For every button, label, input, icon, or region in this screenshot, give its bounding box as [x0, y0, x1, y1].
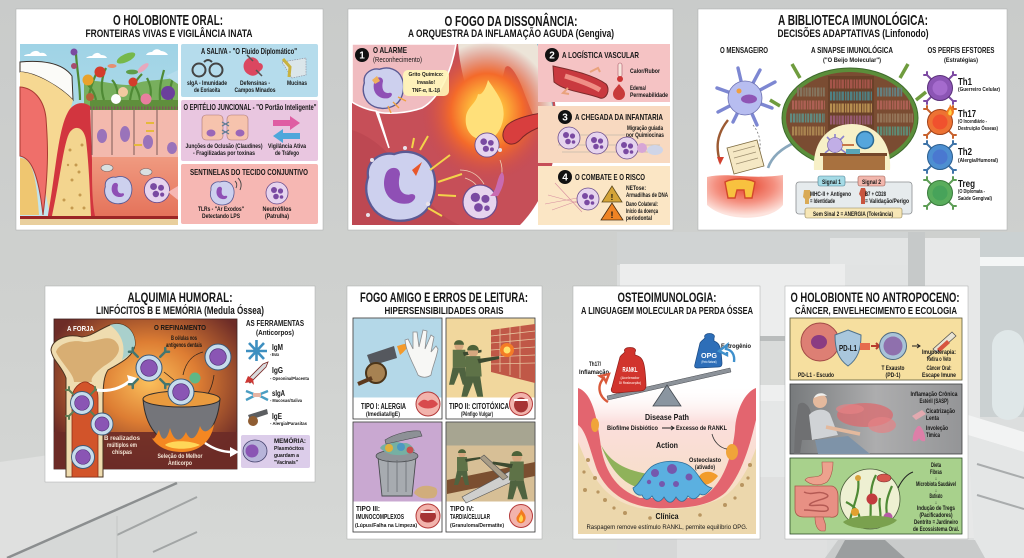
box: cancer: Retira o Veto	[927, 356, 951, 363]
icon: thermometer	[617, 63, 623, 82]
box: ecology: de Ecossistema Oral.	[913, 527, 959, 533]
illustration: forge and refinement: B células nos	[171, 336, 197, 342]
tag: Signal 1: Signal 1	[822, 179, 841, 186]
illustration: lymph node library	[770, 64, 926, 170]
illustration: bone loss scene: Disease Path	[645, 412, 689, 422]
profile: Th2: Th2	[958, 146, 972, 158]
heading: A Biblioteca Imunológica: DECISÕES ADAPTATIVAS (Linfonodo)	[778, 27, 929, 40]
panel: A Biblioteca Imunológica: ("O Beijo Molecular")	[823, 57, 881, 64]
heading: Alquimia Humoral: LINFÓCITOS B E MEMÓRIA (Medula Óssea)	[96, 304, 264, 317]
list: As Ferramentas: AS FERRAMENTAS	[246, 319, 305, 328]
heading: Antropoceno: CÂNCER, ENVELHECIMENTO E ECOLOGIA	[795, 304, 957, 317]
box: Memória: guardam a	[274, 453, 300, 459]
box: ageing: Tímica	[926, 432, 940, 439]
illustration: bone loss scene: Osteoclasto	[689, 458, 721, 464]
box: ageing: Inflamação Crônica	[910, 391, 958, 398]
heading: Fogo Amigo: FOGO AMIGO E ERROS DE LEITURA:	[360, 289, 528, 305]
list: As Ferramentas: - Opsonina/Placenta	[270, 376, 309, 382]
illustration: bone loss scene: Raspagem remove estímulo RANKL, permite equilíbrio OPG.	[586, 524, 748, 531]
box: A Logística Vascular: 2	[549, 50, 555, 62]
box: A Chegada da Infantaria	[538, 106, 670, 163]
box: ageing	[790, 384, 962, 454]
box: Memória	[241, 435, 310, 468]
illustration: bone loss scene: (ativado)	[695, 465, 715, 471]
panel: O Fogo da Dissonância	[348, 9, 673, 230]
box: O Combate e o Risco: periodontal	[626, 215, 652, 222]
icon: tumor cell	[801, 323, 839, 361]
icon: junction cells	[202, 115, 248, 140]
box: ecology: Butirato	[930, 494, 943, 500]
box: signal 1 and signal 2	[796, 176, 912, 218]
icon: RANKL weight	[611, 348, 646, 393]
box: ecology: (Pacificadores)	[920, 513, 952, 519]
box: cancer: T Exausto	[882, 365, 905, 372]
card: Tipo III: (Lúpus/Falha na Limpeza)	[355, 523, 417, 529]
box: A Logística Vascular: Permeabilidade	[630, 92, 668, 99]
box: ageing: Cicatrização	[926, 408, 955, 415]
box: A Saliva: A SALIVA - "O Fluido Diplomático"	[201, 47, 297, 56]
illustration: bone loss scene	[578, 334, 756, 534]
box: cancer: Escape Imune	[922, 372, 956, 379]
box: Memória: "Vacinais"	[274, 460, 298, 466]
box: O Combate e o Risco: O COMBATE E O RISCO	[575, 172, 645, 182]
illustration: bone loss scene: Th17/	[589, 361, 601, 368]
icon: neutrophil	[266, 182, 288, 204]
icon: warning triangles	[601, 186, 623, 220]
box: A Saliva	[181, 44, 318, 97]
list: As Ferramentas: (Anticorpos)	[256, 328, 294, 337]
icon: IgG rocket	[245, 362, 268, 385]
box: A Logística Vascular: Edema/	[630, 85, 646, 92]
list: As Ferramentas: IgM	[272, 342, 283, 352]
callout: O Alarme: O ALARME	[373, 45, 407, 55]
panel: Alquimia Humoral	[45, 286, 315, 482]
illustration: forge and refinement: Anticorpo	[168, 460, 192, 467]
list: As Ferramentas: - Alergia/Parasitas	[270, 421, 307, 427]
box: O Epitélio Juncional: O EPITÉLIO JUNCIONAL - "O Portão Inteligente"	[184, 103, 317, 112]
callout: O Alarme: (Reconhecimento)	[373, 57, 422, 64]
box: ageing: Lenta	[926, 415, 939, 422]
box: cancer	[790, 318, 962, 380]
icon: RANKL weight: RANKL	[622, 365, 638, 374]
icon: PD-L1 shield: PD-L1	[839, 344, 858, 353]
icon: OPG weight: OPG	[701, 351, 717, 360]
heading: O Fogo da Dissonância: A ORQUESTRA DA INFLAMAÇÃO AGUDA (Gengiva)	[408, 27, 614, 40]
illustration: inflamed gingiva	[352, 42, 556, 225]
heading: Antropoceno	[790, 289, 960, 317]
illustration: dendritic cell messenger	[707, 68, 800, 218]
panel: Fogo Amigo e Erros de Leitura	[347, 286, 542, 539]
heading: Osteoimunologia: OSTEOIMUNOLOGIA:	[618, 289, 716, 305]
icon: seesaw	[607, 368, 731, 406]
icon: flame badge	[510, 504, 532, 528]
box: ecology: Fibras	[930, 470, 942, 476]
icon: open mouth	[510, 392, 532, 416]
panel: A Biblioteca Imunológica: O MENSAGEIRO	[720, 46, 768, 55]
box: O Epitélio Juncional	[181, 100, 318, 161]
illustration: bone loss scene: Action	[656, 441, 678, 450]
box: cancer: PD-L1 - Escudo	[798, 372, 834, 379]
box: ecology: ↓	[935, 500, 937, 506]
box: Memória: Plasmócitos	[274, 446, 304, 452]
illustration: bone loss scene: Clínica	[656, 512, 679, 521]
icon: IgE cannon	[248, 409, 268, 426]
heading: O Fogo da Dissonância	[408, 12, 614, 40]
heading: A Biblioteca Imunológica	[778, 11, 929, 40]
box: O Combate e o Risco: NETose:	[626, 185, 646, 192]
heading: O Holobionte Oral: FRONTEIRAS VIVAS E VIGILÂNCIA INATA	[86, 27, 253, 40]
arrow: OPG up	[719, 345, 734, 362]
heading: Osteoimunologia: A LINGUAGEM MOLECULAR DA PERDA ÓSSEA	[581, 304, 753, 317]
card: Tipo II: (Pênfigo Vulgar)	[461, 412, 493, 418]
card: Tipo I	[353, 318, 442, 419]
box: A Logística Vascular: A LOGÍSTICA VASCULAR	[562, 50, 639, 60]
box: A Saliva: Campos Minados	[234, 87, 276, 94]
box: cancer: Imunoterapia:	[922, 349, 956, 356]
icon: T cell and receptor	[860, 332, 906, 360]
callout: O Alarme: Grito Químico:	[408, 72, 444, 78]
icon: migrating neutrophils	[558, 127, 663, 159]
box: O Epitélio Juncional: Junções de Oclusão (Claudines)	[186, 143, 262, 150]
icon: mouth	[416, 504, 440, 528]
box: O Combate e o Risco: 4	[562, 172, 568, 184]
profile: Treg	[924, 177, 992, 209]
icon: traffic arrows	[273, 116, 300, 143]
box: ecology: Indução de Tregs	[917, 506, 955, 512]
icon: trash can	[376, 431, 422, 496]
icon: cannon	[358, 344, 410, 384]
box: O Combate e o Risco	[538, 166, 670, 225]
heading: O Holobionte Oral: O HOLOBIONTE ORAL:	[113, 12, 223, 29]
heading: Osteoimunologia	[581, 289, 753, 317]
box: Sentinelas do tecido conjuntivo: (Patrulha)	[265, 213, 289, 220]
illustration: forge and refinement: Seleção do Melhor	[158, 453, 203, 460]
icon: NETosis	[545, 183, 599, 212]
icon: IgM	[246, 340, 267, 361]
panel: A Biblioteca Imunológica: (Estratégias)	[944, 57, 978, 64]
icon: RANKL weight: Di Reabsorção)	[619, 381, 642, 385]
illustration: bone loss scene: Biofilme Disbiótico	[607, 425, 658, 432]
icon: handcuffs	[192, 60, 222, 76]
box: signal 1 and signal 2: = Identidade	[810, 199, 835, 205]
illustration: bone loss scene: Inflamação	[579, 369, 609, 376]
list: As Ferramentas: IgE	[272, 411, 282, 421]
heading: Alquimia Humoral: ALQUIMIA HUMORAL:	[128, 289, 232, 305]
icon: OPG weight: (Freio Natural)	[702, 360, 717, 364]
profile: Treg: (O Diplomata -	[958, 189, 985, 195]
icon: elderly man in chair	[794, 393, 870, 454]
card: Tipo IV: (Granuloma/Dermatite)	[450, 523, 504, 529]
list: As Ferramentas	[245, 319, 309, 427]
panel: A Biblioteca Imunológica	[698, 9, 1007, 230]
box: Sentinelas do tecido conjuntivo: Neutrófilos	[262, 206, 292, 213]
box: signal 1 and signal 2: MHC-II + Antígeno	[810, 192, 851, 198]
heading: Alquimia Humoral	[96, 289, 264, 317]
illustration: forge and refinement: O REFINAMENTO	[154, 323, 206, 332]
box: ecology: Microbiota Saudável	[916, 482, 956, 488]
icon: impact	[500, 343, 514, 357]
illustration: forge and refinement: múltiplos em	[107, 442, 137, 449]
list: As Ferramentas: - Bruta	[270, 352, 279, 358]
icon: syringe	[927, 332, 956, 358]
box: A Saliva: Defensinas -	[240, 80, 270, 87]
illustration: forge and refinement: chispas	[112, 449, 132, 456]
box: A Saliva: sIgA - Imunidade	[187, 80, 227, 87]
icon: pipe	[462, 455, 516, 503]
box: Sentinelas do tecido conjuntivo: Detectando LPS	[202, 213, 240, 220]
card: Tipo I: (Imediata/IgE)	[366, 412, 400, 418]
box: ecology: ↓	[935, 488, 937, 494]
icon: mucin mesh	[282, 58, 306, 78]
illustration: forge and refinement	[51, 319, 239, 477]
illustration: SASP cloud	[836, 403, 896, 433]
box: A Saliva: de Eoriaoita	[194, 87, 220, 94]
callout: O Alarme: TNF-α, IL-1β	[412, 88, 440, 94]
illustration: forge and refinement: antígenos dentais	[166, 343, 202, 349]
icon: blood vessel	[553, 66, 608, 98]
illustration: tooth, gum and microbiome garden	[20, 44, 178, 225]
tag: Signal 2: Signal 2	[862, 179, 881, 186]
panel: A Biblioteca Imunológica: A SINAPSE IMUNOLÓGICA	[811, 46, 893, 55]
heading: O Fogo da Dissonância: O FOGO DA DISSONÂNCIA:	[444, 12, 578, 30]
box: ecology	[790, 458, 962, 534]
card: Tipo IV	[446, 422, 535, 532]
box: A Chegada da Infantaria: por Quimiocinas	[626, 132, 664, 139]
icon: glove	[405, 330, 438, 377]
icon: warning triangles: !	[610, 210, 614, 220]
box: cancer: Câncer Oral:	[926, 365, 952, 372]
box: ageing: Involeção	[926, 425, 948, 432]
box: O Epitélio Juncional: de Tráfego	[275, 150, 299, 157]
heading: Fogo Amigo: HIPERSENSIBILIDADES ORAIS	[384, 305, 504, 317]
profile: Th17: (O Incendiário -	[958, 119, 987, 125]
icon: lips	[416, 392, 440, 416]
box: ageing: Estéril (SASP)	[920, 398, 948, 405]
box: ecology: Dieta	[931, 463, 941, 469]
card: Tipo III	[353, 422, 442, 532]
box: O Epitélio Juncional: Vigilância Ativa	[268, 143, 306, 150]
box: Sentinelas do tecido conjuntivo: TLRs - "Ar Exodos"	[198, 206, 244, 213]
icon: OPG weight	[695, 334, 722, 368]
box: O Combate e o Risco: Início da doença	[626, 208, 658, 215]
box: Sentinelas do tecido conjuntivo: SENTINELAS DO TECIDO CONJUNTIVO	[190, 168, 308, 177]
panel: A Biblioteca Imunológica: OS PERFIS EFSTORES	[928, 46, 995, 55]
box: O Combate e o Risco: Armadilhas de DNA	[626, 192, 668, 199]
icon: drop	[613, 84, 625, 100]
card: Tipo I: TIPO I: ALERGIA	[361, 402, 406, 411]
icon: PD-L1 shield	[835, 330, 861, 366]
icon: stomach and intestine	[795, 462, 838, 531]
card: Tipo IV: TARDIA/CELULAR	[450, 512, 490, 521]
profile: Th1: Th1	[958, 76, 972, 88]
callout: O Alarme: Invasão!	[417, 80, 435, 86]
box: A Saliva: Mucinas	[287, 80, 307, 87]
panel: O Holobionte Oral	[16, 9, 323, 230]
box: A Logística Vascular: Calor/Rubor	[630, 68, 660, 75]
box: A Chegada da Infantaria: Migração guiada	[627, 125, 663, 132]
box: A Logística Vascular	[538, 44, 670, 102]
box: Sentinelas do tecido conjuntivo	[181, 164, 318, 224]
profile: Th17	[924, 104, 998, 138]
card: Tipo II: TIPO II: CITOTÓXICA	[449, 400, 509, 411]
box: signal 1 and signal 2: = Validação/Perigo	[865, 199, 909, 205]
profile: Th2: (Alergia/Humoral)	[958, 158, 998, 164]
list: As Ferramentas: IgG	[272, 365, 283, 375]
box: signal 1 and signal 2: B7 + CD28	[865, 192, 886, 198]
illustration: bone loss scene: Estrogênio	[721, 343, 751, 350]
profile: Th1	[924, 72, 1000, 104]
heading: Fogo Amigo	[360, 289, 528, 317]
list: As Ferramentas: - Mucosas/Saliva	[270, 398, 302, 404]
illustration: microbiome garden	[840, 469, 900, 529]
box: ecology: Dentrito = Jardineiro	[914, 520, 958, 526]
illustration: bone loss scene: Excesso de RANKL	[676, 425, 727, 432]
icon: macrophage with TLR signal	[210, 178, 241, 205]
card: Tipo III: IMUNOCOMPLEXOS	[356, 512, 404, 521]
panel: O Holobionte no Antropoceno	[785, 286, 968, 539]
profile: Th2	[924, 141, 998, 173]
card: Tipo IV: TIPO IV:	[450, 504, 474, 513]
box: Memória: MEMÓRIA:	[274, 436, 306, 445]
box: A Chegada da Infantaria: 3	[562, 112, 568, 124]
box: A Chegada da Infantaria: A CHEGADA DA INFANTARIA	[575, 112, 663, 122]
card: Tipo III: TIPO III:	[356, 504, 380, 513]
profile: Th1: (Guerreiro Celular)	[958, 87, 1000, 93]
list: As Ferramentas: sIgA	[272, 388, 285, 398]
box: O Combate e o Risco: Dano Colateral:	[626, 201, 658, 208]
heading: A Biblioteca Imunológica: A BIBLIOTECA IMUNOLÓGICA:	[778, 11, 928, 29]
badge: 1: 1	[359, 50, 365, 62]
box: ecology: ↓	[935, 476, 937, 482]
tag: sem sinal 2: Sem Sinal 2 = ANERGIA (Tolerância)	[813, 211, 893, 218]
illustration: forge and refinement: B realizados	[104, 435, 141, 442]
profile: Treg: Saúde Gengival)	[958, 196, 992, 202]
card: Tipo II	[446, 318, 535, 419]
illustration: osteoclast	[633, 461, 712, 502]
panel: Osteoimunologia	[573, 286, 760, 539]
arrow: RANKL up	[599, 374, 609, 402]
icon: soldiers	[449, 340, 499, 397]
profile: Th17: Destruição Ósseas)	[958, 124, 998, 132]
icon: soldiers trench	[454, 449, 528, 499]
icon: RANKL weight: (Acelerador	[620, 376, 640, 380]
icon: warning triangles: !	[611, 193, 613, 202]
illustration: forge and refinement: A FORJA	[67, 324, 94, 333]
icon: defensins against bacterium	[244, 55, 263, 76]
profile: Th17: Th17	[958, 108, 976, 120]
profile: Treg: Treg	[958, 178, 975, 190]
box: cancer: (PD-1)	[886, 372, 900, 379]
callout: O Alarme	[352, 44, 456, 148]
icon: sIgA	[246, 391, 268, 400]
box: O Epitélio Juncional: - Fragilizadas por toxinas	[193, 150, 255, 157]
heading: O Holobionte Oral	[86, 12, 253, 40]
